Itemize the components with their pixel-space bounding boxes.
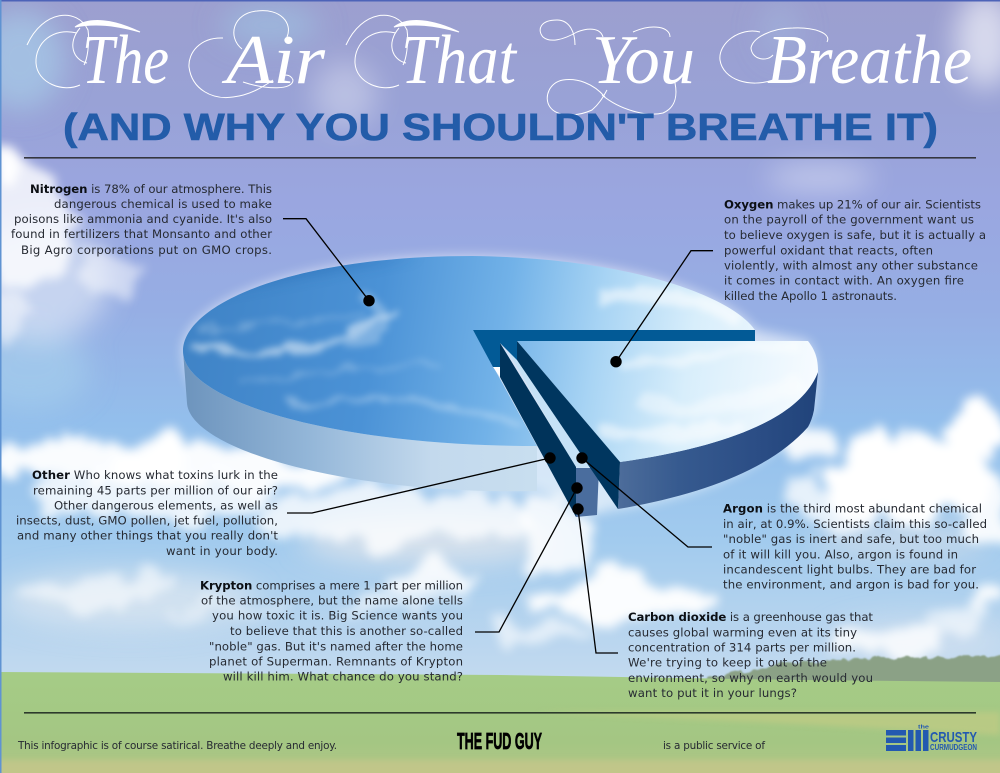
footer: the fud guy wordmark: THE FUD GUY <box>457 728 542 754</box>
text: other: remaining 45 parts per million of our air? <box>33 483 278 497</box>
text: carbon dioxide: causes global warming even at its tiny <box>628 625 857 639</box>
text: krypton: of the atmosphere, but the name alone tells <box>201 594 463 608</box>
text: oxygen: on the payroll of the government want us <box>724 213 974 227</box>
leader lines and dots <box>283 219 713 653</box>
text: other: and many other things that you really don't <box>17 529 278 543</box>
text: krypton: planet of Superman. Remnants of Krypton <box>209 654 463 668</box>
nitrogen inner face <box>500 343 576 517</box>
text: nitrogen <box>11 182 272 257</box>
title: The <box>82 22 169 99</box>
title <box>27 11 972 115</box>
leader: argon <box>576 452 712 547</box>
text: carbon dioxide <box>628 610 873 700</box>
title: You <box>592 22 695 99</box>
text: other: Other Who knows what toxins lurk in the <box>32 468 278 482</box>
glow behind pie <box>183 256 816 517</box>
nitrogen top slice <box>170 250 770 450</box>
text: krypton: Krypton comprises a mere 1 part per million <box>200 579 463 593</box>
text: other: want in your body. <box>166 544 278 558</box>
text: oxygen <box>724 198 986 303</box>
oxygen inner face <box>517 341 620 509</box>
text: carbon dioxide: environment, so why on earth would you <box>628 671 873 685</box>
title: Air <box>222 22 326 99</box>
text: krypton: will kill him. What chance do you stand? <box>223 669 463 683</box>
leader: oxygen <box>610 251 713 367</box>
text: argon: incandescent light bulbs. They are bad for <box>723 562 976 576</box>
text: krypton: to believe that this is another so-called <box>230 624 463 638</box>
text: argon: the environment, and argon is bad for you. <box>723 578 979 592</box>
text: argon: Argon is the third most abundant chemical <box>723 502 982 516</box>
subtitle: (AND WHY YOU SHOULDN'T BREATHE IT) <box>63 107 938 149</box>
text: nitrogen: dangerous chemical is used to make <box>54 197 272 211</box>
logo: crusty curmudgeon <box>886 724 977 752</box>
text: krypton: "noble" gas. But it's named after the home <box>209 639 463 653</box>
footer: disclaimer: This infographic is of course satirical. Breathe deeply and enjoy. <box>17 740 337 752</box>
logo: crusty curmudgeon: the <box>918 724 929 730</box>
text: krypton <box>200 579 463 683</box>
nitrogen side wall <box>183 351 537 491</box>
text: carbon dioxide: We're trying to keep it out of the <box>628 656 827 670</box>
title: That <box>401 22 517 99</box>
title: Breathe <box>767 22 972 99</box>
white gap <box>493 367 500 377</box>
text: other <box>16 468 278 558</box>
leader: carbon dioxide <box>572 503 618 653</box>
text: oxygen: to believe oxygen is safe, but it is actually a <box>724 228 986 242</box>
text: oxygen: powerful oxidant that reacts, often <box>724 243 933 257</box>
text: carbon dioxide: Carbon dioxide is a greenhouse gas that <box>628 610 873 624</box>
text: nitrogen: Big Agro corporations put on GMO crops. <box>21 243 272 257</box>
text: oxygen: it comes in contact with. An oxygen fire <box>724 273 964 287</box>
logo: crusty curmudgeon: CURMUDGEON <box>930 743 977 752</box>
text: other: insects, dust, GMO pollen, jet fuel, pollution, <box>16 514 278 528</box>
text: argon: in air, at 0.9%. Scientists claim this so-called <box>723 517 987 531</box>
argon and carbon dioxide slices <box>503 343 600 468</box>
leader: nitrogen <box>283 219 375 306</box>
leader: krypton <box>475 482 583 632</box>
text: argon: "noble" gas is inert and safe, but too much <box>723 532 979 546</box>
text: nitrogen: Nitrogen is 78% of our atmosphere. This <box>30 182 272 196</box>
text: oxygen: killed the Apollo 1 astronauts. <box>724 289 897 303</box>
text: argon: of it will kill you. Also, argon is found in <box>723 547 958 561</box>
text: carbon dioxide: concentration of 314 parts per million. <box>628 641 856 655</box>
oxygen top slice <box>517 341 818 462</box>
leader: other <box>287 452 556 513</box>
text: krypton: you how toxic it is. Big Science wants you <box>212 609 463 623</box>
pie chart <box>170 250 825 517</box>
logo: crusty curmudgeon: CRUSTY <box>930 729 977 746</box>
blue connecting bar <box>473 330 755 367</box>
text: nitrogen: found in fertilizers that Monsanto and other <box>11 227 272 241</box>
footer: public service note: is a public service of <box>663 740 765 752</box>
text: argon <box>723 502 987 592</box>
oxygen side wall <box>618 372 818 509</box>
text: nitrogen: poisons like ammonia and cyanide. It's also <box>14 212 272 226</box>
text: carbon dioxide: want to put it in your lungs? <box>628 686 797 700</box>
carbon dioxide side wall <box>576 468 599 517</box>
text: oxygen: Oxygen makes up 21% of our air. Scientists <box>724 198 981 212</box>
text: other: Other dangerous elements, as well as <box>54 498 278 512</box>
text: oxygen: violently, with almost any other substance <box>724 258 978 272</box>
